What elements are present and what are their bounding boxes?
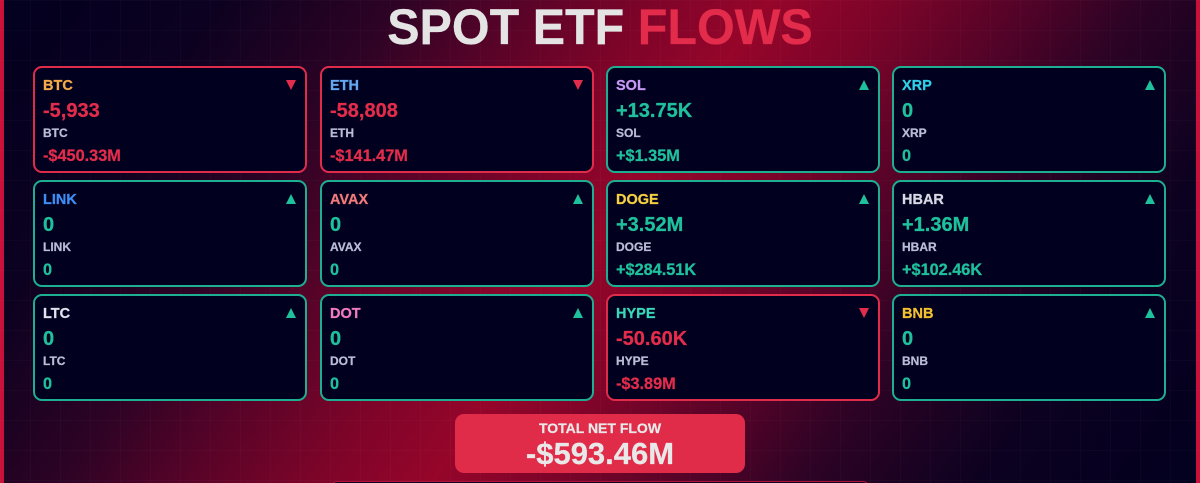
card: HYPE [606, 294, 880, 401]
card: LTC [33, 294, 307, 401]
card: BTC: -5,933 [43, 100, 100, 122]
card: AVAX: AVAX [330, 240, 362, 254]
card: LTC: 0 [43, 328, 54, 350]
card: LINK: LINK [43, 192, 77, 208]
card: HYPE: -$3.89M [616, 375, 676, 393]
card: XRP: 0 [902, 147, 911, 165]
card: BNB: 0 [902, 328, 913, 350]
card: BNB: 0 [902, 375, 911, 393]
card: AVAX: 0 [330, 214, 341, 236]
card: DOT: DOT [330, 306, 361, 322]
card: HBAR: HBAR [902, 192, 944, 208]
card: BTC [33, 66, 307, 173]
card: LTC: LTC [43, 306, 70, 322]
card: XRP: 0 [902, 100, 913, 122]
card: BNB [892, 294, 1166, 401]
card: DOGE [606, 180, 880, 287]
card: HYPE: HYPE [616, 306, 656, 322]
card: HBAR [892, 180, 1166, 287]
card: SOL: SOL [616, 78, 646, 94]
card: HBAR: +$102.46K [902, 261, 982, 279]
card: BNB: BNB [902, 354, 928, 368]
card: DOT: DOT [330, 354, 355, 368]
card: ETH: ETH [330, 126, 354, 140]
card: LINK [33, 180, 307, 287]
total net flow [455, 414, 745, 473]
card: AVAX: 0 [330, 261, 339, 279]
card: LTC: 0 [43, 375, 52, 393]
card: DOT: 0 [330, 328, 341, 350]
card: ETH [320, 66, 594, 173]
card: ETH: ETH [330, 78, 359, 94]
card: BTC: -$450.33M [43, 147, 121, 165]
card: XRP: XRP [902, 126, 927, 140]
card: HYPE: HYPE [616, 354, 649, 368]
card: XRP [892, 66, 1166, 173]
card: DOGE: DOGE [616, 240, 651, 254]
card: SOL: SOL [616, 126, 641, 140]
total net flow: TOTAL NET FLOW [539, 420, 661, 436]
card: HYPE: -50.60K [616, 328, 687, 350]
card: HBAR: +1.36M [902, 214, 969, 236]
card: LINK: 0 [43, 214, 54, 236]
card: DOT: 0 [330, 375, 339, 393]
card: LINK: LINK [43, 240, 71, 254]
card: LTC: LTC [43, 354, 65, 368]
card: AVAX [320, 180, 594, 287]
card: DOGE: +3.52M [616, 214, 683, 236]
card: BTC: BTC [43, 126, 68, 140]
card: AVAX: AVAX [330, 192, 368, 208]
card: BTC: BTC [43, 78, 73, 94]
card: SOL [606, 66, 880, 173]
card: ETH: -58,808 [330, 100, 398, 122]
card: ETH: -$141.47M [330, 147, 408, 165]
card: DOGE: DOGE [616, 192, 659, 208]
total net flow: -$593.46M [526, 436, 674, 471]
card: HBAR: HBAR [902, 240, 937, 254]
card: SOL: +$1.35M [616, 147, 680, 165]
card: DOT [320, 294, 594, 401]
bottom panel edge [331, 481, 869, 483]
card: XRP: XRP [902, 78, 932, 94]
card: SOL: +13.75K [616, 100, 692, 122]
card: BNB: BNB [902, 306, 933, 322]
card: LINK: 0 [43, 261, 52, 279]
card: DOGE: +$284.51K [616, 261, 696, 279]
